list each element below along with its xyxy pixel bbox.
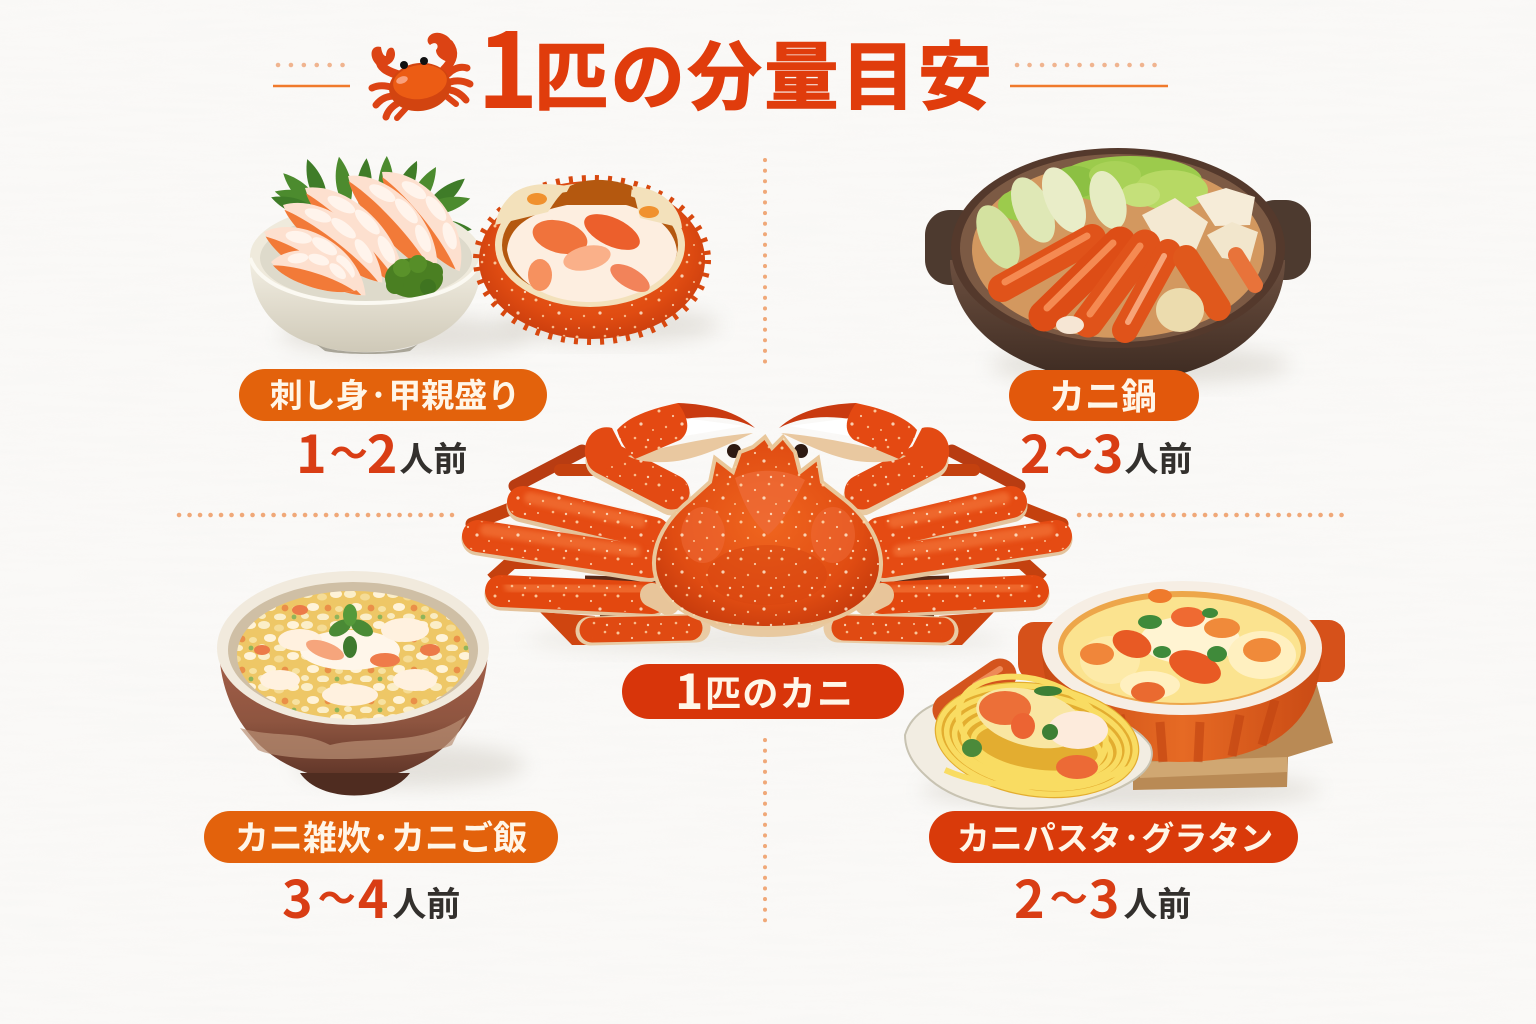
illustration: snow crab — [472, 403, 1062, 654]
title — [477, 0, 992, 138]
illustration: sashimi bowl — [250, 155, 530, 355]
illustration: stuffed crab shell — [477, 179, 720, 343]
leaves — [269, 155, 474, 261]
rice toppings — [254, 604, 440, 706]
icon: small crab — [372, 33, 470, 118]
title: 匹の分量目安 — [534, 18, 992, 125]
pill: whole crab: 匹のカニ — [705, 665, 853, 717]
illustration: rice bowl — [217, 571, 525, 796]
portion: rice: 〜 — [318, 868, 356, 923]
pill: whole crab — [622, 653, 904, 723]
dotted divider right — [1079, 513, 1350, 517]
gratin dish — [1042, 650, 1322, 762]
gratin toppings — [1080, 589, 1296, 702]
pill: rice: カニ雑炊·カニご飯 — [235, 811, 527, 860]
portion: 1-2: 人前 — [399, 432, 467, 481]
bowl back rim — [250, 204, 482, 308]
pill: whole crab: 1 — [675, 653, 703, 723]
gratin handles — [1018, 622, 1068, 680]
tofu — [1142, 188, 1258, 262]
portion: 1-2: 2 — [367, 413, 397, 488]
pill: hot pot: カニ鍋 — [1049, 368, 1157, 420]
wooden board — [1133, 685, 1333, 790]
plate — [905, 696, 1152, 809]
dotted divider top — [763, 160, 767, 372]
portion: rice: 人前 — [392, 877, 460, 926]
noodles — [927, 659, 1147, 811]
title ornament right — [1010, 65, 1168, 86]
shell ridges — [735, 471, 805, 535]
portion: pasta gratin: 3 — [1089, 858, 1119, 933]
portion: pasta gratin: 2 — [1014, 858, 1045, 933]
sausage — [949, 675, 1000, 710]
portion: 1-2: 1 — [296, 413, 327, 488]
portion: hot pot: 3 — [1093, 413, 1123, 488]
crab legs — [1002, 236, 1255, 330]
portion: 1-2: 〜 — [330, 423, 368, 478]
pill: hot pot — [1009, 368, 1199, 421]
garnish — [385, 255, 443, 298]
pill: pasta gratin: カニパスタ·グラタン — [957, 812, 1273, 860]
portion: hot pot: 人前 — [1124, 432, 1192, 481]
portion: pasta gratin: 人前 — [1123, 877, 1191, 926]
pill: sashimi: 刺し身·甲親盛り — [270, 369, 520, 417]
crab slices — [371, 155, 481, 280]
eyes — [727, 444, 741, 458]
portion: rice: 4 — [358, 858, 388, 933]
cabbage — [998, 156, 1208, 221]
title ornament left — [273, 65, 350, 86]
portion: rice: 3 — [282, 858, 313, 933]
illustration: gratin and pasta — [905, 581, 1345, 811]
dotted divider bottom — [763, 740, 767, 924]
rear plate — [705, 612, 830, 637]
illustration: crab hot pot — [925, 148, 1311, 385]
carapace — [654, 437, 881, 628]
shell rim notch — [495, 184, 570, 225]
bowl front — [250, 258, 482, 352]
dotted divider left — [179, 513, 452, 517]
portion: hot pot: 2 — [1020, 413, 1051, 488]
portion: hot pot: 〜 — [1055, 423, 1093, 478]
leeks — [967, 161, 1133, 275]
portion: pasta gratin: 〜 — [1050, 868, 1088, 923]
